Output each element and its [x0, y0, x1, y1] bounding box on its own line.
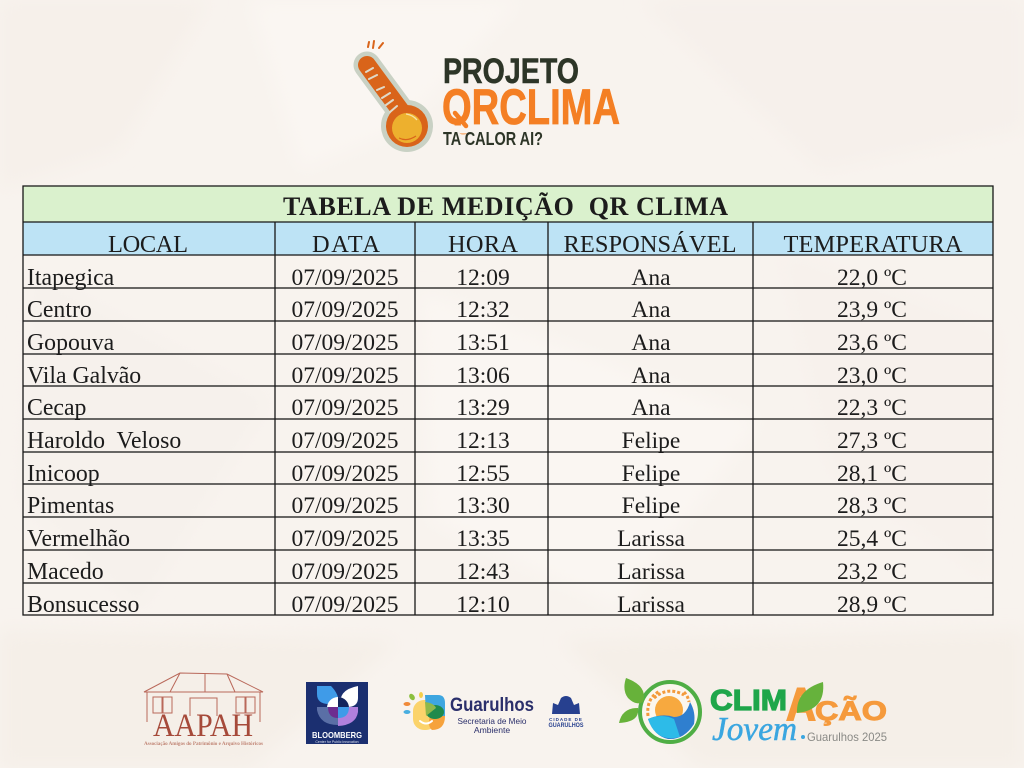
row: Gopouva: 07/09/2025 — [291, 330, 399, 356]
row: Gopouva: Ana — [631, 330, 671, 356]
Secretaria caption: Secretaria de Meio — [458, 716, 527, 726]
row: Gopouva: Gopouva — [27, 330, 115, 356]
row: Centro: 12:32 — [456, 297, 510, 323]
row: Macedo: 12:43 — [456, 559, 510, 585]
logo: Guarulhos Secretaria de Meio Ambiente — [404, 692, 534, 735]
row: Bonsucesso: 28,9 ºC — [837, 592, 907, 618]
logo text: Projeto: PROJETO — [443, 52, 579, 91]
icon: city crest — [552, 696, 580, 714]
row: Inicoop: Inicoop — [27, 461, 100, 487]
row: Haroldo Veloso: 12:13 — [456, 428, 510, 454]
Guarulhos wordmark: Guarulhos — [450, 695, 534, 716]
row: Macedo: Macedo — [27, 559, 104, 585]
row: Centro — [27, 297, 907, 323]
row: Vila Galvão: 23,0 ºC — [837, 363, 907, 389]
Guarulhos caption: GUARULHOS — [548, 722, 584, 729]
row: Inicoop: Felipe — [622, 461, 680, 487]
row: Pimentas: 28,3 ºC — [837, 493, 907, 519]
row: Gopouva: 13:51 — [456, 330, 510, 356]
row: Itapegica: 12:09 — [456, 265, 510, 291]
row: Bonsucesso: Larissa — [617, 592, 685, 618]
row: Itapegica: 07/09/2025 — [291, 265, 399, 291]
row: Vila Galvão: 13:06 — [456, 363, 510, 389]
row: Itapegica: Ana — [631, 265, 671, 291]
row: Itapegica: 22,0 ºC — [837, 265, 907, 291]
Ambiente caption: Ambiente — [474, 725, 510, 735]
logo: AAPAH — [144, 673, 263, 747]
row: Pimentas — [27, 493, 907, 519]
logo: Cidade de Guarulhos — [548, 696, 584, 729]
icon: Guarulhos mark — [404, 692, 445, 730]
row: Cecap: Cecap — [27, 395, 86, 421]
dot separator — [801, 735, 805, 739]
row: Bonsucesso: 12:10 — [456, 592, 510, 618]
row: Cecap: Ana — [631, 395, 671, 421]
row: Centro: Ana — [631, 297, 671, 323]
Bloomberg caption: Center for Public Innovation — [315, 740, 359, 744]
wordmark: Jovem: Jovem — [712, 711, 797, 748]
table column headers: HORA — [448, 231, 518, 258]
row: Pimentas: Felipe — [622, 493, 680, 519]
row: Inicoop: 28,1 ºC — [837, 461, 907, 487]
row: Macedo: 07/09/2025 — [291, 559, 399, 585]
row: Macedo — [27, 559, 907, 585]
Bloomberg wordmark: BLOOMBERG — [312, 730, 362, 740]
row: Cecap: 07/09/2025 — [291, 395, 399, 421]
row: Centro: 23,9 ºC — [837, 297, 907, 323]
wordmark: Guarulhos 2025: Guarulhos 2025 — [807, 730, 887, 744]
row: Bonsucesso — [27, 592, 907, 618]
logo text: QRClima: QRCLIMA — [442, 79, 620, 135]
row: Inicoop: 07/09/2025 — [291, 461, 399, 487]
row: Haroldo Veloso: Haroldo Veloso — [27, 428, 181, 454]
table column headers: DATA — [312, 231, 380, 258]
table column headers: RESPONSÁVEL — [564, 230, 736, 258]
row: Centro: Centro — [27, 297, 92, 323]
row: Vermelhão: 13:35 — [456, 526, 510, 552]
icon: AAPAH building — [144, 673, 263, 722]
row: Haroldo Veloso: 27,3 ºC — [837, 428, 907, 454]
row: Haroldo Veloso — [27, 428, 907, 454]
row: Bonsucesso: Bonsucesso — [27, 592, 139, 618]
row: Cecap: 13:29 — [456, 395, 510, 421]
row: Vermelhão: 07/09/2025 — [291, 526, 399, 552]
row: Macedo: 23,2 ºC — [837, 559, 907, 585]
row: Vermelhão: Larissa — [617, 526, 685, 552]
logo text: Ta calor ai?: TA CALOR AI? — [443, 129, 543, 149]
table column headers: TEMPERATURA — [784, 231, 963, 258]
row: Pimentas: Pimentas — [27, 493, 114, 519]
wordmark: Ação: ÇÃO — [815, 695, 887, 726]
row: Itapegica — [27, 265, 907, 291]
logo: Bloomberg — [306, 682, 368, 744]
row: Haroldo Veloso: Felipe — [622, 428, 680, 454]
table title band — [23, 186, 993, 222]
row: Macedo: Larissa — [617, 559, 685, 585]
row: Itapegica: Itapegica — [27, 265, 115, 291]
row: Inicoop — [27, 461, 907, 487]
AAPAH wordmark: AAPAH — [153, 708, 253, 744]
row: Vermelhão: 25,4 ºC — [837, 526, 907, 552]
row: Gopouva — [27, 330, 907, 356]
row: Pimentas: 07/09/2025 — [291, 493, 399, 519]
logo: Projeto QRClima — [366, 41, 620, 152]
row: Bonsucesso: 07/09/2025 — [291, 592, 399, 618]
table: medição QR Clima — [23, 186, 993, 618]
row: Vermelhão: Vermelhão — [27, 526, 130, 552]
row: Cecap — [27, 395, 907, 421]
logo: ClimAção Jovem — [619, 678, 887, 748]
row: Haroldo Veloso: 07/09/2025 — [291, 428, 399, 454]
icon: thermometer — [366, 41, 433, 152]
row: Centro: 07/09/2025 — [291, 297, 399, 323]
row: Pimentas: 13:30 — [456, 493, 510, 519]
row: Vila Galvão: Vila Galvão — [27, 363, 141, 389]
Cidade de caption: CIDADE DE — [549, 717, 583, 722]
wordmark: Ação: A — [786, 678, 816, 730]
table column headers: LOCAL — [108, 231, 188, 258]
row: Vila Galvão: 07/09/2025 — [291, 363, 399, 389]
wordmark: Ação — [786, 678, 887, 730]
row: Inicoop: 12:55 — [456, 461, 510, 487]
row: Gopouva: 23,6 ºC — [837, 330, 907, 356]
row: Vermelhão — [27, 526, 907, 552]
row: Vila Galvão: Ana — [631, 363, 671, 389]
icon: sun and wave in a green ring — [619, 678, 700, 742]
row: Vila Galvão — [27, 363, 907, 389]
wordmark: Clim: CLIM — [710, 685, 787, 717]
AAPAH caption: Associação Amigos do Patrimônio e Arquivo Históricos — [144, 741, 263, 747]
table title band: TABELA DE MEDIÇÃO QR CLIMA — [283, 192, 728, 221]
row: Cecap: 22,3 ºC — [837, 395, 907, 421]
table column headers — [23, 222, 993, 258]
